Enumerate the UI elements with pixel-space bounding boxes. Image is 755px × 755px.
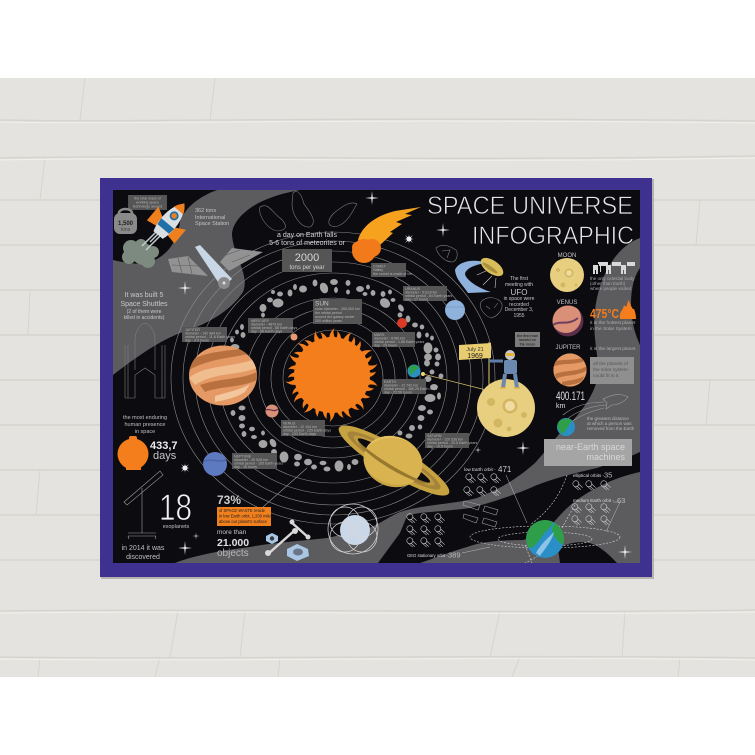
- icon: alien head outline: [480, 298, 502, 318]
- label: Comet: Halley: [373, 268, 383, 272]
- low Earth orbit group: [463, 465, 527, 523]
- stat: 73% space waste: in low Earth orbit, 1,200 miles: [219, 514, 273, 518]
- flag: July 21 1969: 1969: [467, 353, 483, 360]
- icon: flame: [620, 300, 636, 319]
- label: Mars: [372, 332, 425, 348]
- label: Neptune: orbital period - 165 Earth years: [234, 462, 284, 466]
- callout: total mass of technology: working space: [136, 200, 159, 204]
- heading: Jupiter: JUPITER: [555, 345, 581, 351]
- title: SPACE UNIVERSE: [427, 192, 633, 220]
- dashed orbits around Earth: [470, 475, 620, 563]
- callout: all the planets: [590, 357, 634, 384]
- text: Space Shuttles: Space Shuttles: [120, 301, 168, 308]
- label: Sun: SUN: [315, 300, 329, 308]
- callout: the first man: the moon: [520, 342, 535, 346]
- elliptical orbit group: 35: [604, 470, 612, 480]
- text: Moon fact: [590, 276, 635, 291]
- low Earth orbit group: low Earth orbit -: [464, 467, 496, 472]
- icon: orange space capsule: [118, 436, 148, 470]
- poster content: [113, 190, 640, 563]
- stat: 400.171 km: [556, 391, 585, 410]
- label: Venus: [281, 420, 331, 436]
- icon: rocket with smoke: [122, 204, 186, 268]
- text: greatest distance: [587, 416, 635, 431]
- text: in 2014 discovered: discovered: [126, 554, 160, 561]
- icon: flying saucer: [477, 254, 506, 288]
- planet: Earth in orbit, with moon: [408, 364, 425, 378]
- heading: Venus: VENUS: [557, 300, 577, 306]
- icon: kettlebell 1,500 tons: tons: [121, 227, 131, 233]
- stat: 433,7 days: [150, 440, 178, 462]
- big moon with craters: [477, 379, 535, 437]
- label: Jupiter: day - 9.9 hours: [185, 338, 209, 342]
- text: UFO: The first: [510, 276, 529, 282]
- stat: 73% space waste: above our planet's surface: [219, 519, 268, 524]
- planet: Saturn: [338, 425, 450, 496]
- stat: 475 degrees: 475°C: [590, 306, 619, 321]
- brick wall background: [0, 78, 755, 677]
- purple picture frame: [100, 178, 652, 577]
- text: UFO: UFO: [511, 288, 527, 297]
- label: Mars: day - 24 hours: [374, 344, 397, 348]
- moon disc: [550, 258, 584, 292]
- callout: total mass of technology: the total mass of: [134, 196, 161, 200]
- GEO orbit group: 389: [448, 550, 461, 560]
- text: greatest distance: at which a person was: [587, 421, 632, 426]
- heading: Moon: MOON: [558, 253, 576, 259]
- icon: kettlebell 1,500 tons: 1,500: [118, 221, 134, 227]
- label: Earth: EARTH: [384, 380, 397, 384]
- text: greatest distance: removed from the Earth: [587, 426, 635, 431]
- callout: the first man: [515, 332, 540, 347]
- text: meteorites: a day on Earth falls: [277, 232, 337, 239]
- text: Space Shuttles: It was built 5: [125, 292, 164, 299]
- grey wave: right and bottom: [175, 238, 640, 563]
- label: Jupiter: [182, 327, 235, 342]
- planet: Uranus: [445, 300, 465, 320]
- stat: 21.000 objects: [217, 529, 249, 559]
- text: Venus fact: [590, 320, 636, 332]
- label: Mercury: [248, 318, 297, 334]
- callout: all the planets: all the planets of: [593, 361, 629, 367]
- label: Saturn: day - 10.5 hours: [427, 444, 453, 448]
- text: UFO: recorded: [509, 302, 529, 308]
- low Earth orbit group: 471: [498, 465, 512, 474]
- text: greatest distance: the greatest distance: [587, 416, 629, 421]
- picture frame shadow: [101, 179, 654, 579]
- planet: Neptune: [203, 452, 227, 476]
- medium Earth orbit group: [571, 496, 625, 532]
- text: Moon fact: (other than Earth): [590, 281, 626, 286]
- medium Earth orbit group: medium Earth orbit -: [573, 498, 614, 503]
- stat: 21.000 objects: objects: [217, 548, 249, 559]
- label: Sun: around the galaxy center: [315, 315, 355, 319]
- text: Space Shuttles: [120, 292, 168, 321]
- label: Mars: orbital period - 1.88 Earth years: [374, 340, 425, 344]
- stat: 433,7 days: days: [153, 450, 177, 462]
- label: Saturn: diameter - 120 536 km: [427, 438, 463, 442]
- callout: all the planets: could fit in it: [593, 373, 619, 379]
- label: Comet: the comet is made of ice: [373, 272, 412, 276]
- label: Mars: diameter - 6780 km: [374, 336, 405, 340]
- text: most enduring presence: the most enduring: [123, 415, 167, 421]
- icon: telescope: [124, 471, 163, 539]
- line: asteroid to callout: [263, 468, 307, 507]
- icon: space station: [168, 245, 263, 289]
- label: Jupiter: JUPITER: [185, 328, 200, 332]
- label: Neptune: NEPTUNE: [234, 454, 252, 458]
- label: Saturn: orbital period - 29.5 Earth years: [427, 441, 478, 445]
- stat: 18 exoplanets: exoplanets: [163, 524, 190, 530]
- label: Sun: solar diameter - 300,000 km: [315, 307, 360, 311]
- big Earth: [526, 519, 565, 558]
- label: Uranus: [403, 286, 453, 302]
- icons: satellite panels: [463, 501, 498, 527]
- text: meteorites: [270, 232, 345, 245]
- icon: sphere with orbital web: [328, 504, 378, 554]
- elliptical orbit group: [572, 470, 612, 492]
- label: Saturn: [425, 433, 478, 448]
- icon: small Earth: [557, 418, 575, 436]
- box: near-Earth space machines: [544, 439, 632, 466]
- text: Venus fact: it is the hottest planet: [590, 320, 636, 326]
- label: Uranus: orbital period - 84 Earth years: [405, 294, 453, 298]
- icon: space shuttle outline: [125, 323, 165, 398]
- label: Neptune: day - 16 hours: [234, 465, 257, 469]
- text: meteorites: 5-6 tons of meteorites or: [269, 240, 346, 247]
- box: near-Earth space machines: machines: [586, 452, 625, 462]
- label: Venus: VENUS: [283, 422, 296, 426]
- label: Earth: diameter - 12 742 km: [384, 384, 418, 388]
- asteroid belt: [230, 280, 443, 471]
- Venus disc: [551, 303, 584, 336]
- line: Earth moon to big moon: [423, 374, 484, 390]
- orbit rings: [171, 232, 495, 524]
- label: Venus: orbital period - 225 Earth days: [283, 428, 331, 432]
- callout: all the planets: the solar system: [593, 367, 628, 373]
- label: Mercury: day - 58 Earth days: [251, 330, 282, 334]
- label: Jupiter: orbital period - 11.8 Earth years: [185, 335, 235, 339]
- text: UFO: [504, 276, 535, 319]
- label: Earth: [382, 379, 437, 394]
- planet: Mars: [397, 318, 407, 328]
- label: Neptune: diameter - 49 528 km: [234, 458, 268, 462]
- label: Uranus: URANUS: [405, 287, 421, 291]
- label: Comet: COMET: [373, 264, 387, 268]
- stat: 21.000 objects: more than: [217, 529, 247, 536]
- Jupiter disc: [553, 353, 587, 387]
- flag: July 21 1969: July 21: [466, 347, 484, 353]
- GEO orbit group: GEO stationary orbit -: [407, 553, 448, 558]
- stat: 400.171 km: km: [556, 403, 566, 410]
- stat: 18 exoplanets: 18: [159, 487, 192, 528]
- stat: 73% space waste: 73%: [217, 493, 241, 507]
- label: Saturn: SATURN: [427, 434, 442, 438]
- planet: Mercury: [290, 334, 298, 340]
- text: UFO: in space were: [504, 296, 535, 302]
- label: Venus: day - 243 Earth days: [283, 432, 316, 436]
- icon: UFO beam crescent: [455, 261, 491, 293]
- astronaut: [489, 350, 520, 388]
- label: Sun: the orbital period: [315, 311, 342, 315]
- icon: rocket outline with trails: [563, 395, 628, 423]
- label: Venus: diameter - 12 104 km: [283, 425, 317, 429]
- label: Earth: day - 23.56 hours: [384, 390, 412, 394]
- text: in 2014 discovered: in 2014 it was: [122, 545, 165, 552]
- medium Earth orbit group: 63: [617, 496, 625, 505]
- label: Jupiter: diameter - 142 984 km: [185, 332, 221, 336]
- icon: kettlebell 1,500 tons: [114, 209, 137, 234]
- label: Sun: [313, 299, 362, 324]
- text: UFO: 1955: [513, 313, 525, 319]
- callout: the first man: the first man: [517, 334, 538, 338]
- text: UFO: December 3,: [505, 307, 533, 313]
- stat: 433,7 days: 433,7: [150, 440, 178, 452]
- label: Mercury: orbital period - 88 Earth days: [251, 326, 297, 330]
- icons: meteorite outlines: [260, 191, 357, 231]
- label: Mercury: diameter - 4879 km: [251, 322, 282, 326]
- text: International Space Station: International: [195, 215, 225, 221]
- text: Space Shuttles: killed in accidents): [124, 315, 165, 321]
- text: Venus fact: in the Solar System: [590, 326, 632, 332]
- planet: Venus in orbit: [266, 404, 278, 418]
- grey wave: upper left: [113, 190, 300, 375]
- stat: 73% space waste: of SPACE WASTE reside: [219, 508, 266, 513]
- text: UFO: meeting with: [505, 282, 533, 288]
- text: most enduring presence: human presence: [125, 422, 165, 428]
- box: 2000 tons per year: 2000: [295, 252, 319, 264]
- GEO orbit group: [406, 512, 490, 560]
- black crescent on right edge: [631, 268, 640, 345]
- text: Moon fact: where people visited: [590, 286, 632, 291]
- stat: 21.000 objects: 21.000: [217, 537, 249, 549]
- big orange planet: Jupiter: [189, 345, 257, 406]
- box: 2000 tons per year: tons per year: [289, 265, 325, 271]
- label: Earth: orbital period - 365.25 Earth days: [384, 387, 437, 391]
- icons: astronauts with flags: [593, 262, 635, 274]
- box: 2000 tons per year: [282, 249, 332, 272]
- title: INFOGRAPHIC: [472, 222, 634, 250]
- black poster background: [113, 190, 640, 563]
- text: most enduring presence: [123, 415, 167, 435]
- elliptical orbit group: elliptical orbits -: [573, 473, 605, 478]
- sun: [285, 328, 379, 422]
- flag: July 21 1969: [459, 342, 491, 391]
- text: Jupiter fact: it is the largest planet: [590, 346, 636, 352]
- text: International Space Station: [195, 208, 229, 227]
- box: near-Earth space machines: near-Earth space: [556, 442, 625, 452]
- label: Neptune: [232, 453, 284, 469]
- label: Uranus: diameter - 51118 km: [405, 290, 437, 294]
- stars: [177, 191, 632, 559]
- label: Mercury: MERCURY: [251, 319, 270, 323]
- label: Comet: [371, 263, 412, 277]
- stat: 400.171 km: 400.171: [556, 391, 585, 403]
- icons: wrenches and nuts: [265, 520, 310, 561]
- grey wave: lower right: [420, 472, 640, 563]
- text: International Space Station: Space Station: [195, 221, 229, 227]
- text: Moon fact: the only celestial body: [590, 276, 635, 281]
- label: Uranus: day - 17 hours: [405, 298, 428, 302]
- title: [428, 196, 633, 244]
- text: most enduring presence: in space: [135, 429, 155, 435]
- text: in 2014 discovered: [122, 545, 165, 561]
- stat: 73% space waste: [217, 493, 273, 526]
- text: Space Shuttles: (2 of them were: [127, 309, 162, 315]
- callout: the first man: landed on: [519, 338, 536, 342]
- callout: total mass of technology: technology around: [133, 204, 162, 208]
- label: Sun: 200 million years: [315, 319, 342, 323]
- callout: total mass of technology: [128, 195, 167, 210]
- text: International Space Station: 362 tons: [195, 208, 216, 214]
- icon: robot outline: [436, 245, 457, 262]
- comet: [352, 207, 421, 263]
- label: Mars: MARS: [374, 333, 385, 337]
